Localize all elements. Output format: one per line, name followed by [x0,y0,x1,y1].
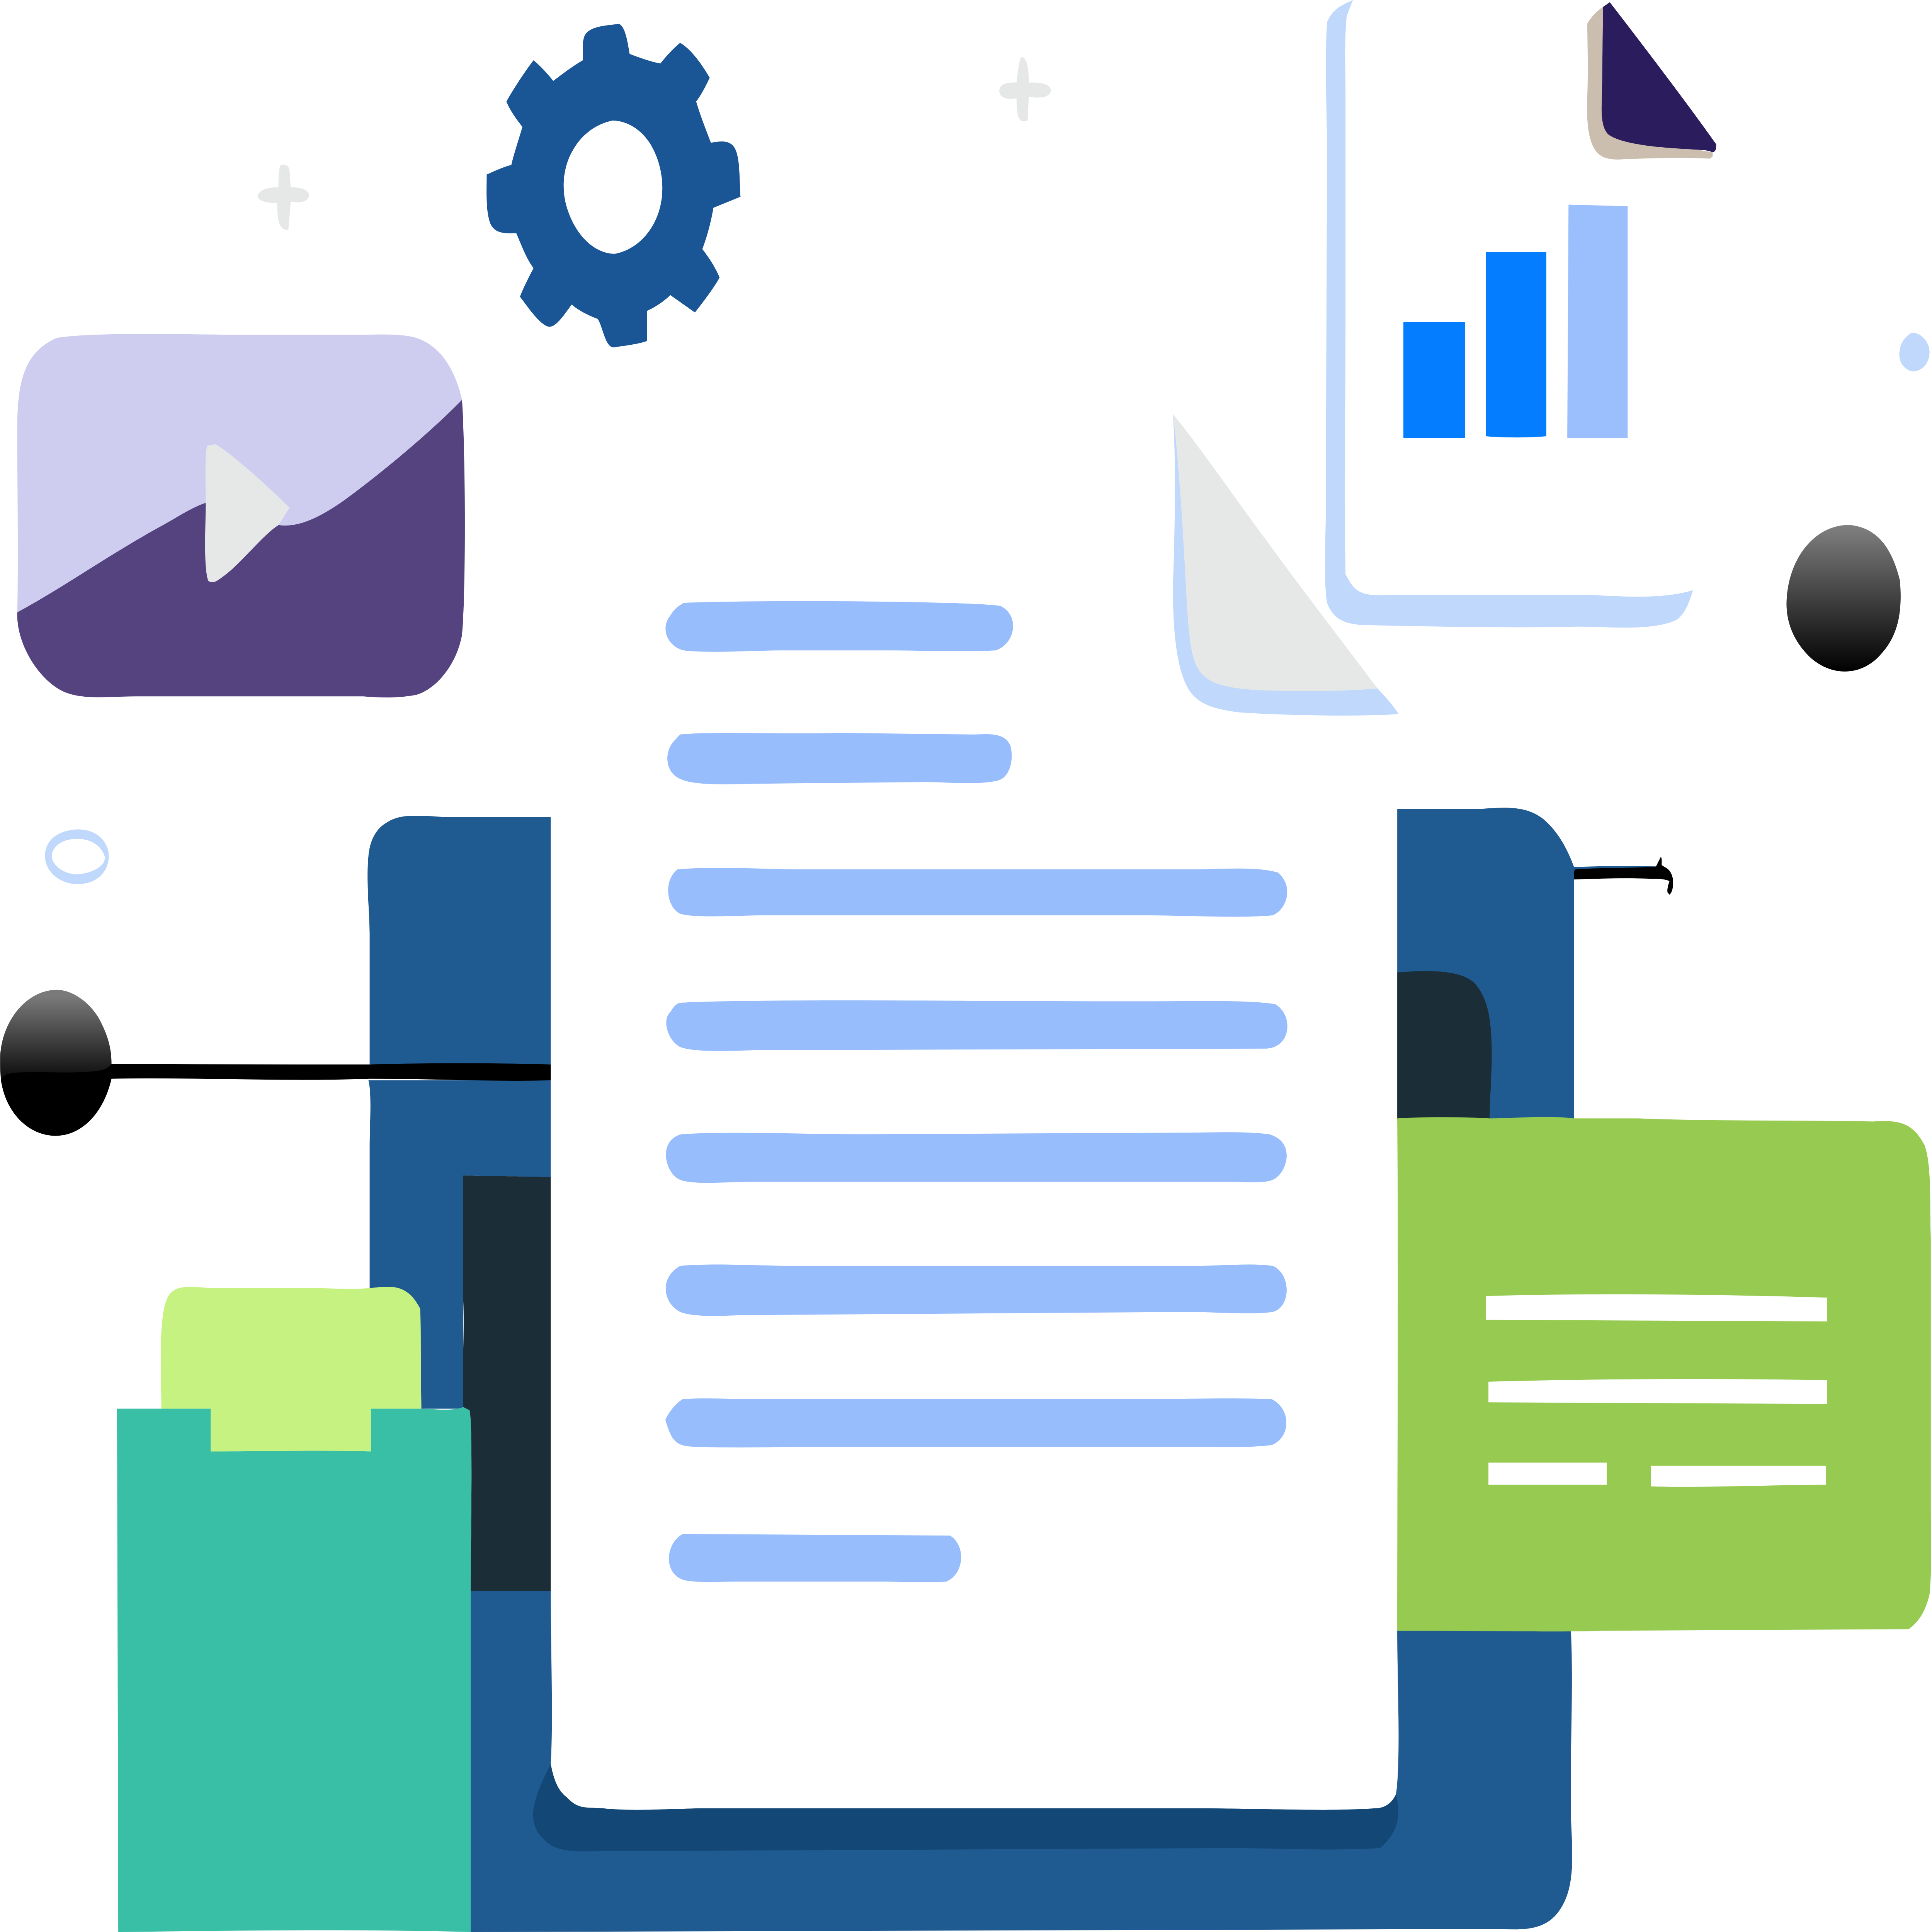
panel: document shadow [533,1764,1398,1851]
line 4 [666,1000,1287,1051]
icon: sparkle left [257,165,309,230]
corner back [1587,7,1713,160]
panel: teal folder [117,1407,471,1932]
card body [1397,1117,1931,1631]
panel: dark shadow right [1397,971,1492,1118]
ball lower black [1,1064,112,1136]
chart: bar chart with axes [1325,0,1693,628]
hook line [1574,857,1673,895]
icon: right hook line [1573,857,1673,895]
icon: light blue ring [45,830,109,884]
card bar 1 [1486,1294,1827,1321]
video background [17,334,462,612]
panel: light green paper [161,1287,422,1451]
line 2 [667,733,1012,784]
icon: play triangle [205,444,289,582]
bar 1 [1403,322,1465,438]
corner front [1602,2,1716,152]
icon: left pin ball [0,990,112,1136]
icon: light blue dot [1899,333,1930,371]
line 5 [666,1132,1287,1183]
bar 2 [1486,252,1546,437]
fold backing [1173,414,1398,716]
ball upper gradient [0,990,112,1080]
hook blue sliver [1573,866,1656,871]
icon: triangle page fold [1173,414,1398,716]
panel: dark shadow left [463,1175,552,1591]
icon: left pin line [111,1063,551,1081]
document text lines [665,601,1287,1582]
panel: upper left blue tab [367,816,551,1065]
line 7 [665,1398,1286,1447]
video lower band [17,400,465,697]
panel: mid left blue tab [368,1080,551,1409]
chart axes [1325,0,1693,628]
panel: bottom blue base [471,1591,1572,1932]
bar 3 [1567,205,1628,438]
icon: sparkle top [999,57,1051,121]
icon: gear [486,24,740,347]
icon: folded corner top right [1587,2,1716,160]
panel: video player [17,334,465,697]
line 8 [669,1534,961,1582]
panel: upper right blue tab [1397,808,1574,1120]
line 3 [668,868,1287,917]
line 1 [665,601,1013,652]
panel: green card [1397,1117,1931,1631]
card bar 3 [1488,1463,1607,1485]
card bar 4 [1651,1466,1826,1487]
panel: white document [551,809,1399,1810]
line 6 [666,1264,1287,1316]
card bar 2 [1488,1379,1827,1404]
icon: right ball [1786,525,1901,672]
fold face [1173,414,1378,691]
